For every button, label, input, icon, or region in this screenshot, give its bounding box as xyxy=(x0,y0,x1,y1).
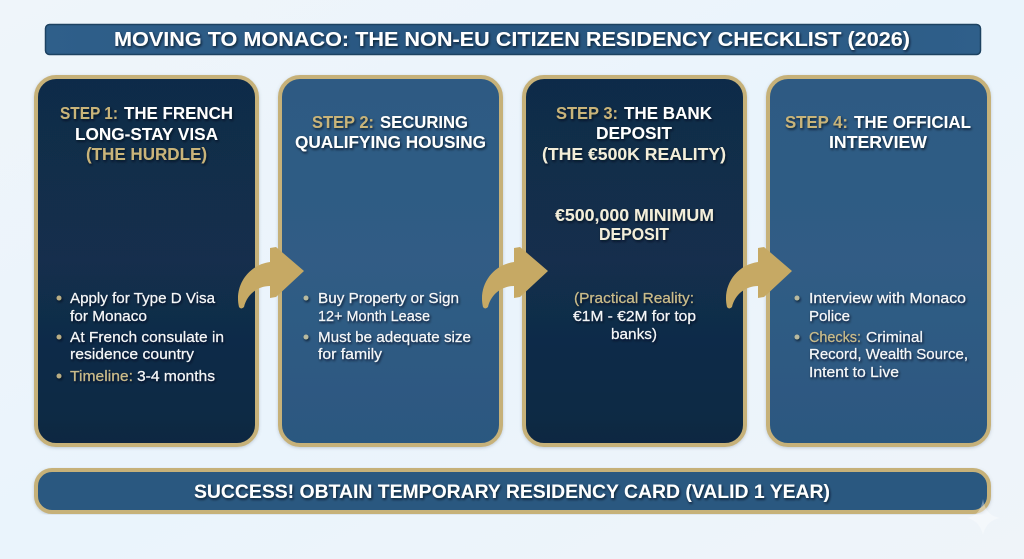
panel: step 1 xyxy=(36,77,257,445)
title banner xyxy=(46,24,980,54)
step 1 bullets: for Monaco xyxy=(70,308,147,325)
panel: step 4 xyxy=(768,77,989,445)
step 1 bullets: Timeline: xyxy=(70,368,133,385)
step 3 heading: THE BANK xyxy=(624,103,712,123)
step 1 heading: STEP 1: xyxy=(60,103,118,123)
step 1 heading xyxy=(60,103,233,164)
step 4 heading: THE OFFICIAL xyxy=(854,112,971,132)
step 1 heading: (THE HURDLE) xyxy=(86,144,207,164)
step 4 heading xyxy=(785,112,971,152)
step 1 bullets: Apply for Type D Visa xyxy=(70,290,216,307)
step 2 bullets: Must be adequate size xyxy=(318,329,471,346)
step 2 heading: SECURING xyxy=(380,112,468,132)
minimum deposit callout xyxy=(555,205,714,244)
step 4 bullets: Intent to Live xyxy=(809,364,899,381)
minimum deposit callout: €500,000 MINIMUM xyxy=(555,205,714,225)
step 1 heading: LONG-STAY VISA xyxy=(75,124,218,144)
step 2 heading: QUALIFYING HOUSING xyxy=(295,132,486,152)
step 1 heading: THE FRENCH xyxy=(124,103,233,123)
success text: SUCCESS! OBTAIN TEMPORARY RESIDENCY CARD (VALID 1 YEAR) xyxy=(194,482,830,503)
step 1 bullets xyxy=(56,290,224,385)
panel: step 3 xyxy=(524,77,745,445)
step 3 heading: STEP 3: xyxy=(556,103,618,123)
minimum deposit callout: DEPOSIT xyxy=(599,224,669,244)
step 4 bullets: Interview with Monaco xyxy=(809,290,966,307)
panel: step 2 xyxy=(280,77,501,445)
icon: sparkle watermark xyxy=(967,499,1000,535)
practical reality note xyxy=(573,290,696,343)
step 3 heading: (THE €500K REALITY) xyxy=(542,144,726,164)
title text: MOVING TO MONACO: THE NON-EU CITIZEN RESIDENCY CHECKLIST (2026) xyxy=(114,29,910,51)
step 4 bullets xyxy=(794,290,968,381)
step 4 bullets: Checks: xyxy=(809,329,861,346)
step 3 heading: DEPOSIT xyxy=(596,123,672,143)
step 2 heading: STEP 2: xyxy=(312,112,374,132)
step 2 bullets: 12+ Month Lease xyxy=(318,308,430,325)
step 2 bullets: for family xyxy=(318,346,383,363)
step 4 heading: STEP 4: xyxy=(785,112,848,132)
step 4 bullets: Record, Wealth Source, xyxy=(809,346,968,363)
practical reality note: €1M - €2M for top xyxy=(573,308,696,325)
step 2 heading xyxy=(295,112,486,152)
step 2 bullets: Buy Property or Sign xyxy=(318,290,459,307)
step 1 bullets: residence country xyxy=(70,346,195,363)
arrow: step 2 to step 3 xyxy=(482,247,548,308)
arrow: step 1 to step 2 xyxy=(238,247,304,308)
step 4 bullets: Criminal xyxy=(866,329,923,346)
step 4 heading: INTERVIEW xyxy=(829,132,927,152)
step 2 bullets xyxy=(304,290,471,363)
arrow: step 3 to step 4 xyxy=(726,247,792,308)
practical reality note: (Practical Reality: xyxy=(574,290,694,307)
success banner xyxy=(36,470,989,512)
step 3 heading xyxy=(542,103,726,164)
step 1 bullets: At French consulate in xyxy=(70,329,224,346)
step 4 bullets: Police xyxy=(809,308,850,325)
practical reality note: banks) xyxy=(611,326,657,343)
step 1 bullets: 3-4 months xyxy=(137,368,215,385)
